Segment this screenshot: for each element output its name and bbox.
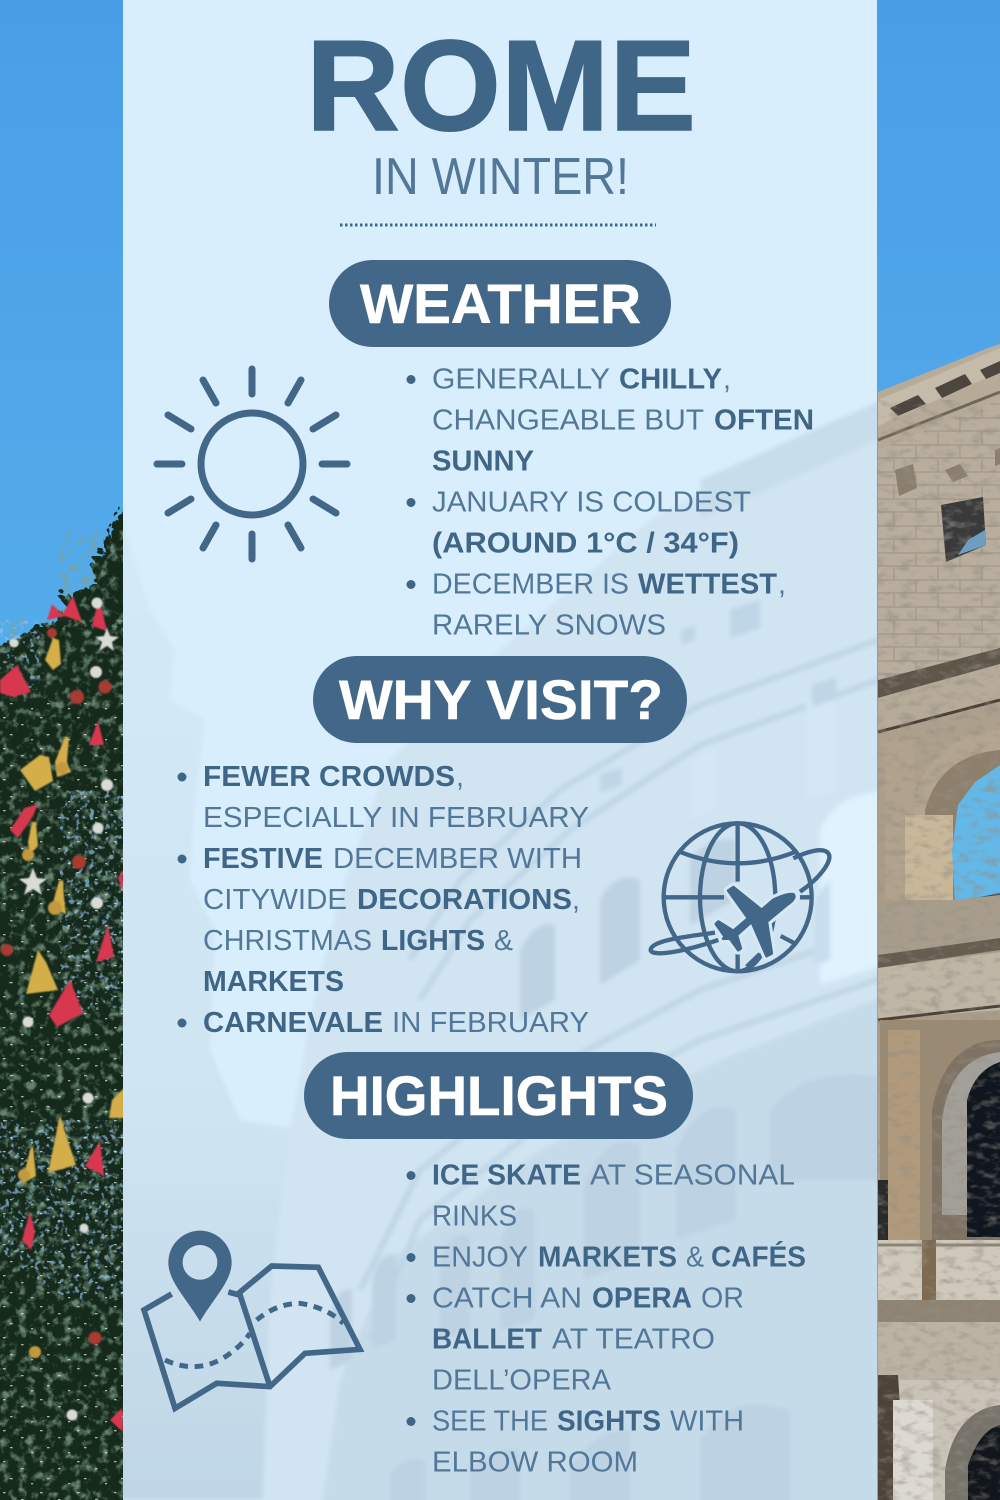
text block: reasons to visit: ,: [456, 761, 464, 793]
text block: weather facts: GENERALLY: [432, 364, 610, 396]
stone weathering texture: [878, 400, 1000, 1500]
heading: highlights: HIGHLIGHTS: [330, 1064, 668, 1127]
text block: weather facts: [406, 364, 814, 642]
text block: highlights list: RINKS: [432, 1200, 517, 1232]
text block: highlights list: DELL’OPERA: [432, 1364, 611, 1396]
text block: highlights list: SEE THE: [432, 1406, 548, 1438]
text block: highlights list: CAFÉS: [711, 1242, 806, 1274]
title: ROME: ROME: [306, 14, 696, 158]
text block: reasons to visit: &: [494, 925, 513, 957]
text block: highlights list: &: [686, 1242, 704, 1274]
text block: reasons to visit: [178, 761, 589, 1039]
text block: weather facts: ,: [723, 364, 731, 396]
subtitle: in winter: IN WINTER!: [372, 148, 629, 206]
text block: reasons to visit: IN FEBRUARY: [392, 1007, 589, 1039]
text block: reasons to visit: CITYWIDE: [203, 884, 347, 916]
text block: reasons to visit: CHRISTMAS: [203, 925, 372, 957]
dotted divider: [340, 224, 656, 226]
text block: reasons to visit: ESPECIALLY IN FEBRUARY: [203, 802, 589, 834]
text block: weather facts: SUNNY: [432, 446, 534, 478]
translucent centre panel: [100, 0, 900, 1500]
heading: why visit: WHY VISIT?: [339, 668, 663, 731]
text block: reasons to visit: DECORATIONS: [357, 884, 572, 916]
text block: reasons to visit: LIGHTS: [381, 925, 485, 957]
text block: reasons to visit: FEWER CROWDS: [203, 761, 455, 793]
text block: weather facts: JANUARY IS COLDEST: [432, 486, 751, 518]
text block: highlights list: AT TEATRO: [552, 1324, 715, 1356]
text block: highlights list: CATCH AN: [432, 1282, 582, 1314]
text block: reasons to visit: FESTIVE: [203, 843, 323, 875]
text block: weather facts: CHILLY: [619, 364, 722, 396]
icon: globe with plane: [651, 823, 829, 971]
heading: highlights: [304, 1052, 693, 1139]
text block: weather facts: OFTEN: [714, 404, 814, 436]
text block: reasons to visit: DECEMBER WITH: [333, 843, 582, 875]
icon: sun: [157, 369, 347, 559]
text block: weather facts: WETTEST: [638, 568, 778, 600]
text block: weather facts: DECEMBER IS: [432, 568, 629, 600]
text block: weather facts: CHANGEABLE BUT: [432, 404, 704, 436]
text block: highlights list: AT SEASONAL: [590, 1160, 795, 1192]
heading: weather: [329, 260, 671, 347]
text block: reasons to visit: ,: [572, 884, 580, 916]
heading: weather: WEATHER: [360, 272, 641, 335]
text block: weather facts: ,: [778, 568, 786, 600]
icon: map with pin: [144, 1231, 360, 1408]
background photo: christmas tree: [0, 500, 128, 1500]
text block: highlights list: MARKETS: [538, 1242, 677, 1274]
text block: weather facts: (AROUND 1°C / 34°F): [432, 528, 739, 560]
text block: highlights list: WITH: [670, 1406, 744, 1438]
text block: highlights list: ELBOW ROOM: [432, 1446, 638, 1478]
text block: highlights list: [406, 1160, 806, 1478]
text block: reasons to visit: CARNEVALE: [203, 1007, 383, 1039]
text block: highlights list: SIGHTS: [557, 1406, 661, 1438]
text block: weather facts: RARELY SNOWS: [432, 610, 666, 642]
colosseum window: [941, 497, 986, 562]
text block: highlights list: OPERA: [592, 1282, 692, 1314]
text block: reasons to visit: MARKETS: [203, 966, 344, 998]
text block: highlights list: OR: [701, 1282, 744, 1314]
heading: why visit: [313, 656, 687, 743]
background photo: colosseum wall: [878, 344, 1000, 1500]
text block: highlights list: BALLET: [432, 1324, 543, 1356]
text block: highlights list: ICE SKATE: [432, 1160, 581, 1192]
text block: highlights list: ENJOY: [432, 1242, 528, 1274]
